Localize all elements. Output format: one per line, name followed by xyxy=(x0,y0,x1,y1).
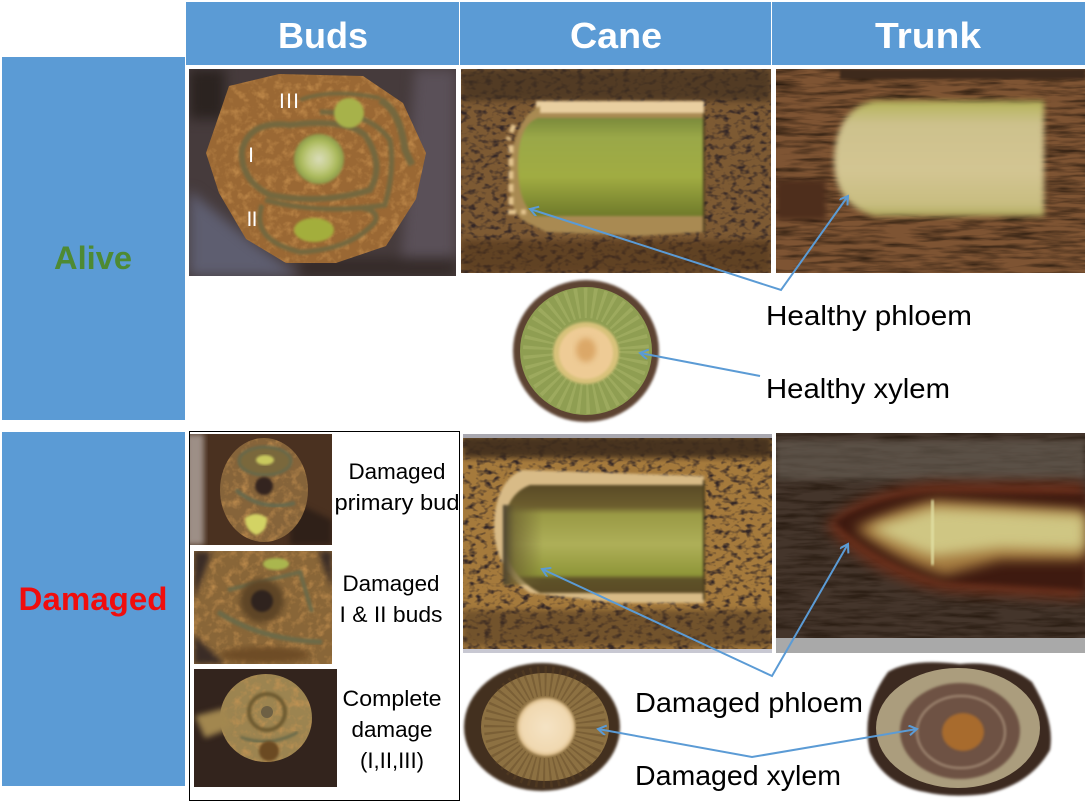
photo: damaged cane xyxy=(463,434,772,653)
label: damaged phloem: Damaged phloem xyxy=(635,687,863,718)
caption: complete damage: (I,II,III) xyxy=(360,748,424,773)
caption: damaged I and II buds: Damaged xyxy=(342,571,440,596)
photo: damaged cane cross-section xyxy=(464,663,620,791)
photo: damaged trunk xyxy=(776,433,1085,653)
panel: damaged buds box xyxy=(186,432,460,800)
arrows: healthy phloem xyxy=(530,196,848,290)
arrow: healthy xylem xyxy=(640,353,760,376)
caption: complete damage: Complete xyxy=(342,686,442,711)
row label: Damaged xyxy=(2,432,185,786)
caption: damaged primary bud: primary bud xyxy=(334,490,460,515)
caption: complete damage xyxy=(342,686,442,773)
label: healthy xylem: Healthy xylem xyxy=(766,373,950,404)
bud labels: I xyxy=(248,144,254,167)
photo: damaged trunk cross-section xyxy=(867,662,1051,796)
caption: damaged I and II buds: I & II buds xyxy=(340,602,442,627)
header: Cane: Cane xyxy=(570,15,662,56)
photo: complete damage xyxy=(194,669,337,787)
bud labels xyxy=(246,90,299,231)
label: healthy phloem: Healthy phloem xyxy=(766,300,972,331)
photo: damaged primary bud xyxy=(190,434,332,545)
header: Buds xyxy=(186,2,459,65)
bud labels: II xyxy=(246,208,258,231)
arrows: damaged xylem xyxy=(598,729,917,757)
bud labels: III xyxy=(279,90,299,113)
photo: alive cane xyxy=(461,69,771,273)
header: Trunk xyxy=(772,2,1085,65)
caption: damaged I and II buds xyxy=(340,571,442,627)
row label: Alive xyxy=(2,57,185,420)
row label: Damaged: Damaged xyxy=(18,581,168,617)
photo: damaged I and II buds xyxy=(194,551,332,664)
label: damaged xylem: Damaged xylem xyxy=(635,760,841,791)
row label: Alive: Alive xyxy=(54,240,132,276)
header: Cane xyxy=(460,2,771,65)
caption: damaged primary bud xyxy=(334,459,460,515)
caption: complete damage: damage xyxy=(352,717,432,742)
arrows: damaged phloem xyxy=(542,544,848,676)
header: Trunk: Trunk xyxy=(875,15,982,56)
header: Buds: Buds xyxy=(278,15,368,56)
photo: alive cane cross-section xyxy=(513,280,659,422)
photo: alive trunk xyxy=(776,69,1085,273)
caption: damaged primary bud: Damaged xyxy=(348,459,446,484)
photo: alive bud cross-section xyxy=(189,69,456,276)
